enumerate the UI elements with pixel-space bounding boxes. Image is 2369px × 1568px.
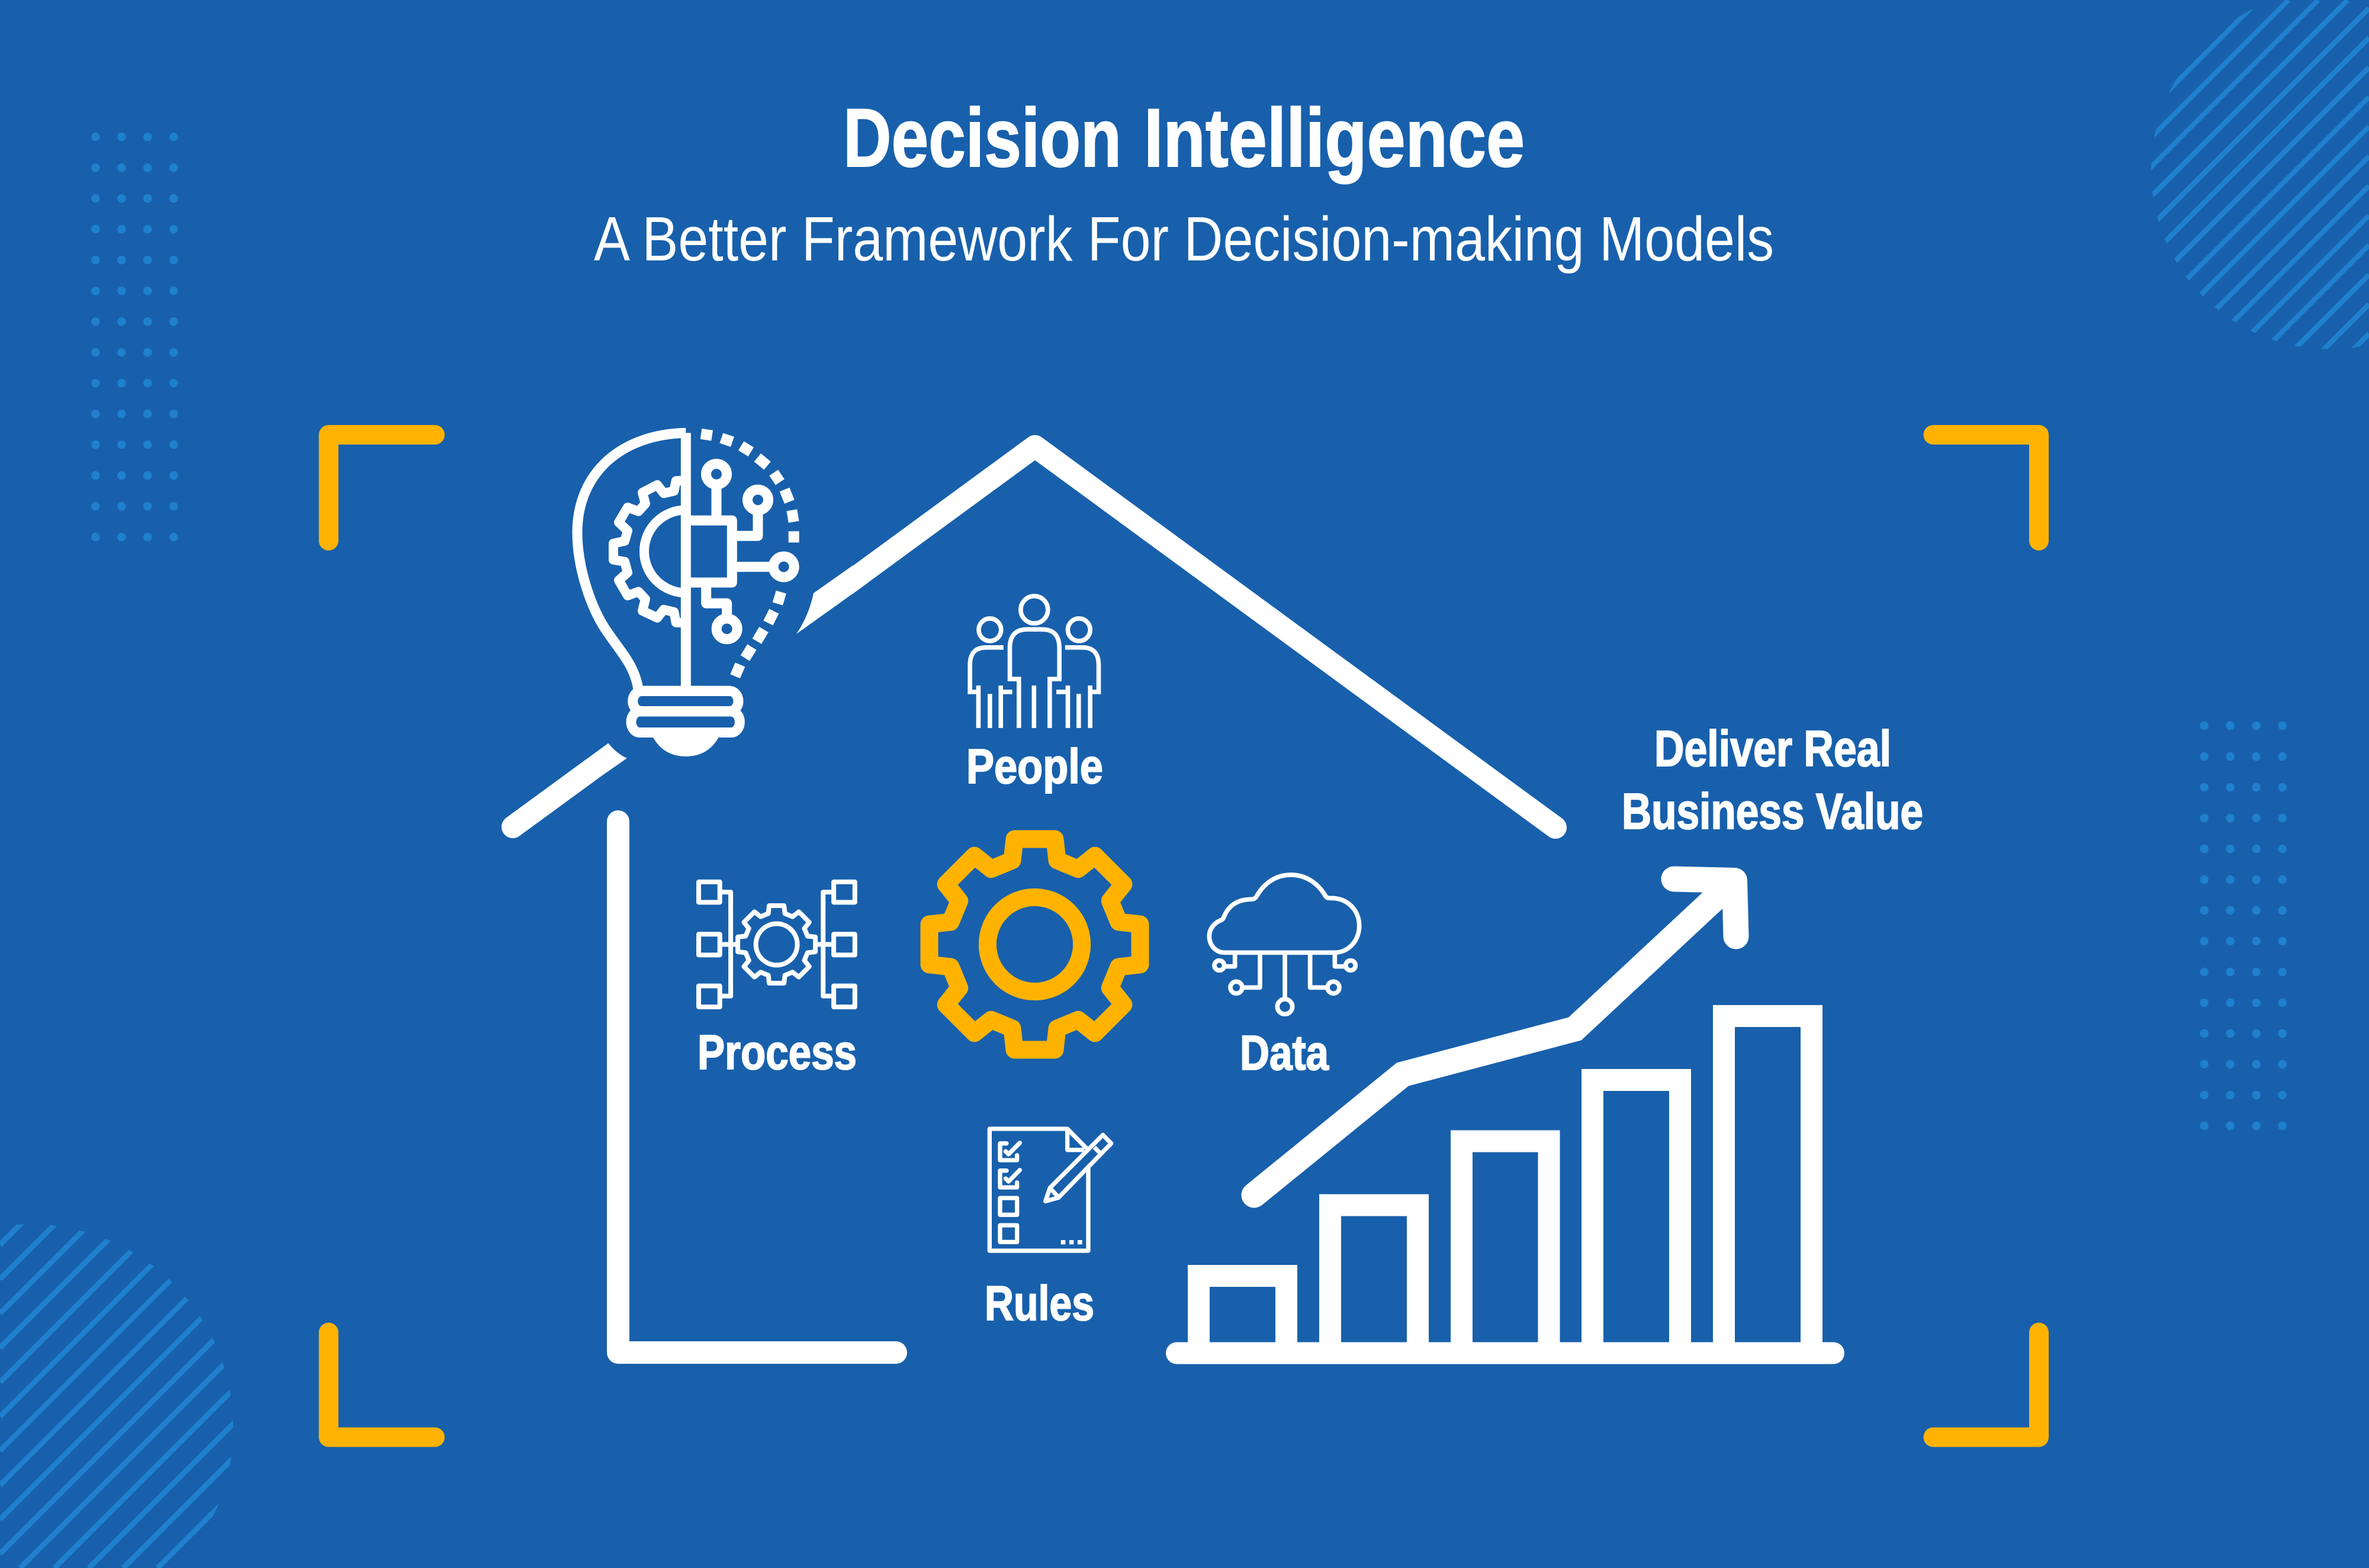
bulb base — [631, 691, 740, 756]
roof: left lower slope — [513, 743, 627, 827]
subtitle: A Better Framework For Decision-making Models — [594, 204, 1774, 274]
decorative striped circle: top right — [2151, 0, 2369, 349]
decorative striped circle: bottom left — [0, 1224, 233, 1568]
label: Deliver Real Business Value — [1622, 721, 1923, 840]
process gear — [738, 906, 815, 983]
chart baseline — [1177, 1342, 1833, 1364]
label: People: People — [966, 739, 1103, 794]
bar chart — [1177, 1016, 1833, 1353]
corner bracket: top left — [329, 434, 435, 541]
icon: data cloud — [1209, 875, 1359, 1014]
icon: light bulb with gear and circuit — [577, 433, 794, 756]
dotted halo — [701, 434, 794, 677]
label: Deliver Real Business Value: Business Value — [1622, 784, 1923, 840]
label: Rules: Rules — [985, 1276, 1094, 1331]
circuit chip and nodes — [686, 464, 794, 639]
growth arrow — [1254, 879, 1736, 1195]
roof: apex and right slope — [796, 446, 1555, 828]
icon: process — [699, 882, 855, 1007]
icon: rules checklist — [989, 1129, 1111, 1251]
corner bracket: bottom left — [329, 1332, 435, 1437]
icon: people — [970, 596, 1099, 728]
half gear — [613, 480, 686, 623]
title: Decision — [843, 91, 1121, 184]
title: Intelligence — [1144, 91, 1525, 184]
decorative dot grid: top left — [82, 121, 187, 552]
label: Process: Process — [697, 1025, 857, 1080]
bulb outline — [577, 433, 730, 691]
corner bracket: top right — [1933, 434, 2039, 541]
decorative dot grid: right — [2191, 710, 2296, 1141]
label: Deliver Real Business Value: Deliver Real — [1654, 721, 1891, 777]
label: Data: Data — [1240, 1025, 1329, 1080]
wall and floor — [618, 822, 896, 1353]
icon: central gold gear — [930, 839, 1140, 1050]
house outline — [513, 446, 1555, 1353]
process boxes and connectors — [699, 882, 855, 1007]
bars — [1198, 1016, 1812, 1353]
corner bracket: bottom right — [1933, 1332, 2039, 1437]
